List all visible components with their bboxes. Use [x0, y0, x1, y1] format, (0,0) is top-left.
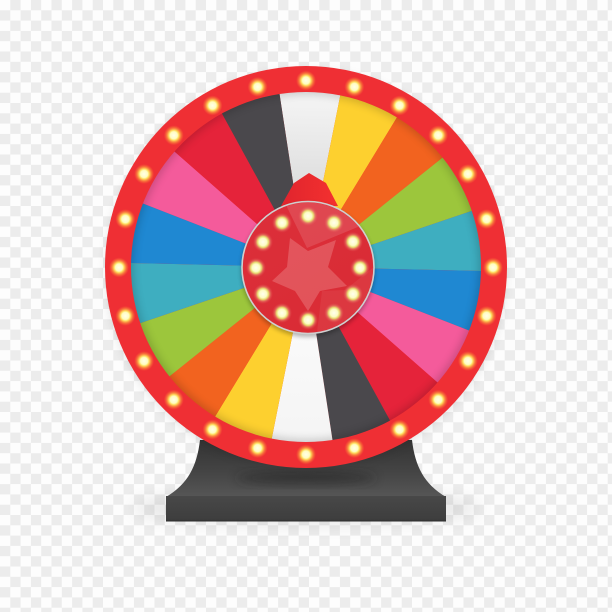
hub: gloss [286, 202, 373, 332]
icon: star [272, 238, 347, 311]
hub: shadow [241, 203, 375, 337]
wheel [105, 66, 507, 470]
hub: rim and disc [242, 202, 374, 334]
wheel: inner rim shadow [128, 89, 484, 445]
wheel: coloured segments [122, 86, 490, 448]
stand: wheel shadow [236, 471, 376, 485]
wheel: drop shadow [106, 70, 506, 470]
hub [241, 200, 380, 340]
hub: lights [246, 206, 370, 330]
stand: front face [166, 496, 446, 522]
wheel: red outer ring [105, 66, 507, 468]
arrow: red pointer [281, 173, 338, 206]
stand [166, 440, 446, 522]
wheel: ring lights [109, 70, 503, 464]
stand: top surface [166, 440, 446, 497]
ground shadow [131, 492, 481, 524]
